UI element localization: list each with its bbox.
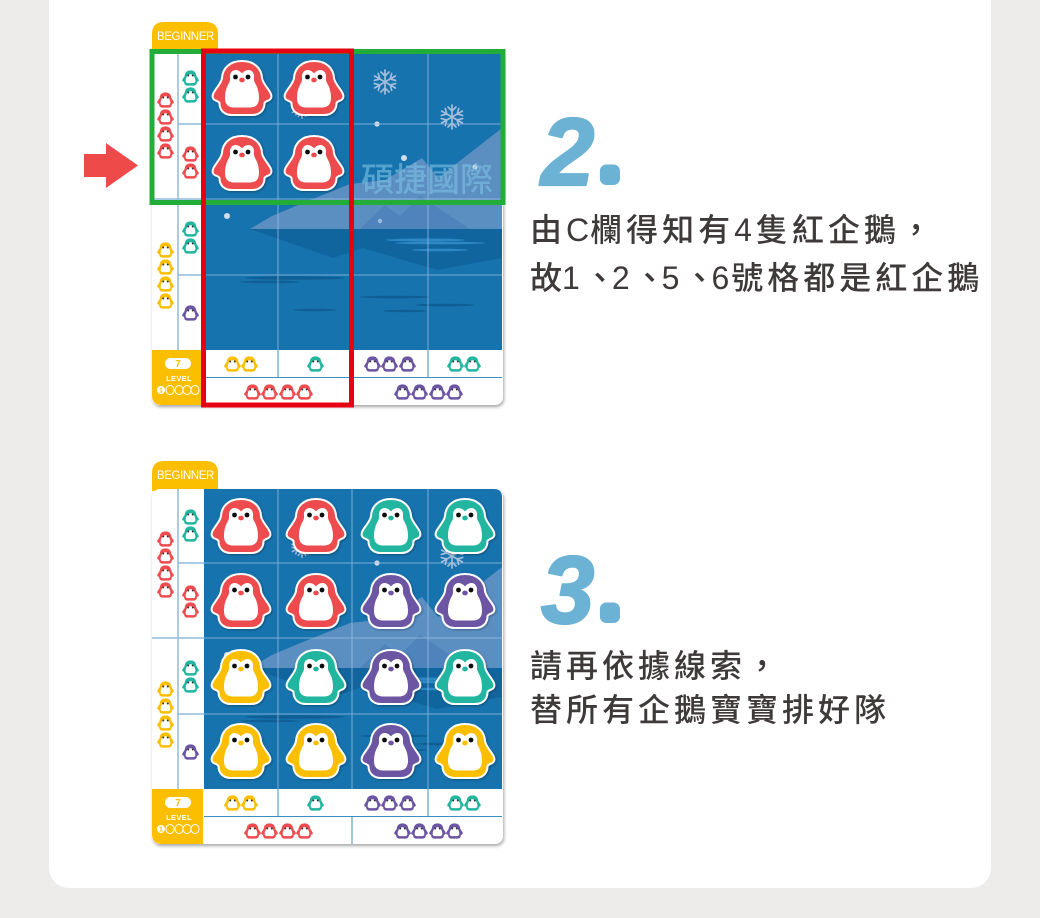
BEGINNER tab: BEGINNER: [157, 470, 214, 482]
level badge: 7: [175, 359, 181, 370]
bottom clue row: [204, 350, 502, 400]
puzzle board: step 2: [152, 22, 503, 405]
level badge: 1: [159, 388, 163, 394]
step 3 description: 請再依據線索，: [530, 648, 782, 684]
BEGINNER tab: [152, 461, 218, 491]
step 3 description: [530, 648, 890, 728]
step 3 number: 3: [541, 537, 594, 644]
level badge: [152, 789, 203, 844]
level badge: 7: [175, 798, 181, 809]
level badge: [152, 350, 203, 405]
BEGINNER tab: [152, 22, 218, 52]
left clue column: [152, 50, 204, 350]
step 3 description: 替所有企鵝寶寶排好隊: [530, 692, 890, 728]
board card: [152, 50, 503, 405]
step 2 description: 由C欄得知有4隻紅企鵝，: [530, 212, 936, 248]
red highlight: column: [204, 51, 352, 405]
watermark: 碩捷國際: [361, 161, 493, 198]
level badge: LEVEL: [166, 813, 192, 822]
green highlight: row C: [152, 52, 503, 202]
step 3 number: .: [603, 572, 617, 628]
solved penguin grid: [212, 499, 494, 778]
step 2 number: .: [603, 134, 617, 190]
ice scene grid: [204, 50, 502, 350]
step 2 description: [530, 212, 983, 296]
board card: [152, 489, 503, 844]
left clue column: [152, 489, 204, 789]
puzzle board: step 3: [152, 461, 503, 844]
red arrow pointer: [84, 143, 138, 188]
red penguins solved: [213, 61, 343, 190]
ice scene grid: [204, 489, 502, 789]
step 2 number: 2: [541, 99, 594, 206]
level badge: 1: [159, 826, 163, 834]
bottom clue row: [204, 789, 502, 844]
BEGINNER tab: BEGINNER: [157, 31, 214, 43]
level badge: LEVEL: [166, 374, 192, 383]
step 2 description: 故1、2、5、6號格都是紅企鵝: [530, 260, 983, 296]
